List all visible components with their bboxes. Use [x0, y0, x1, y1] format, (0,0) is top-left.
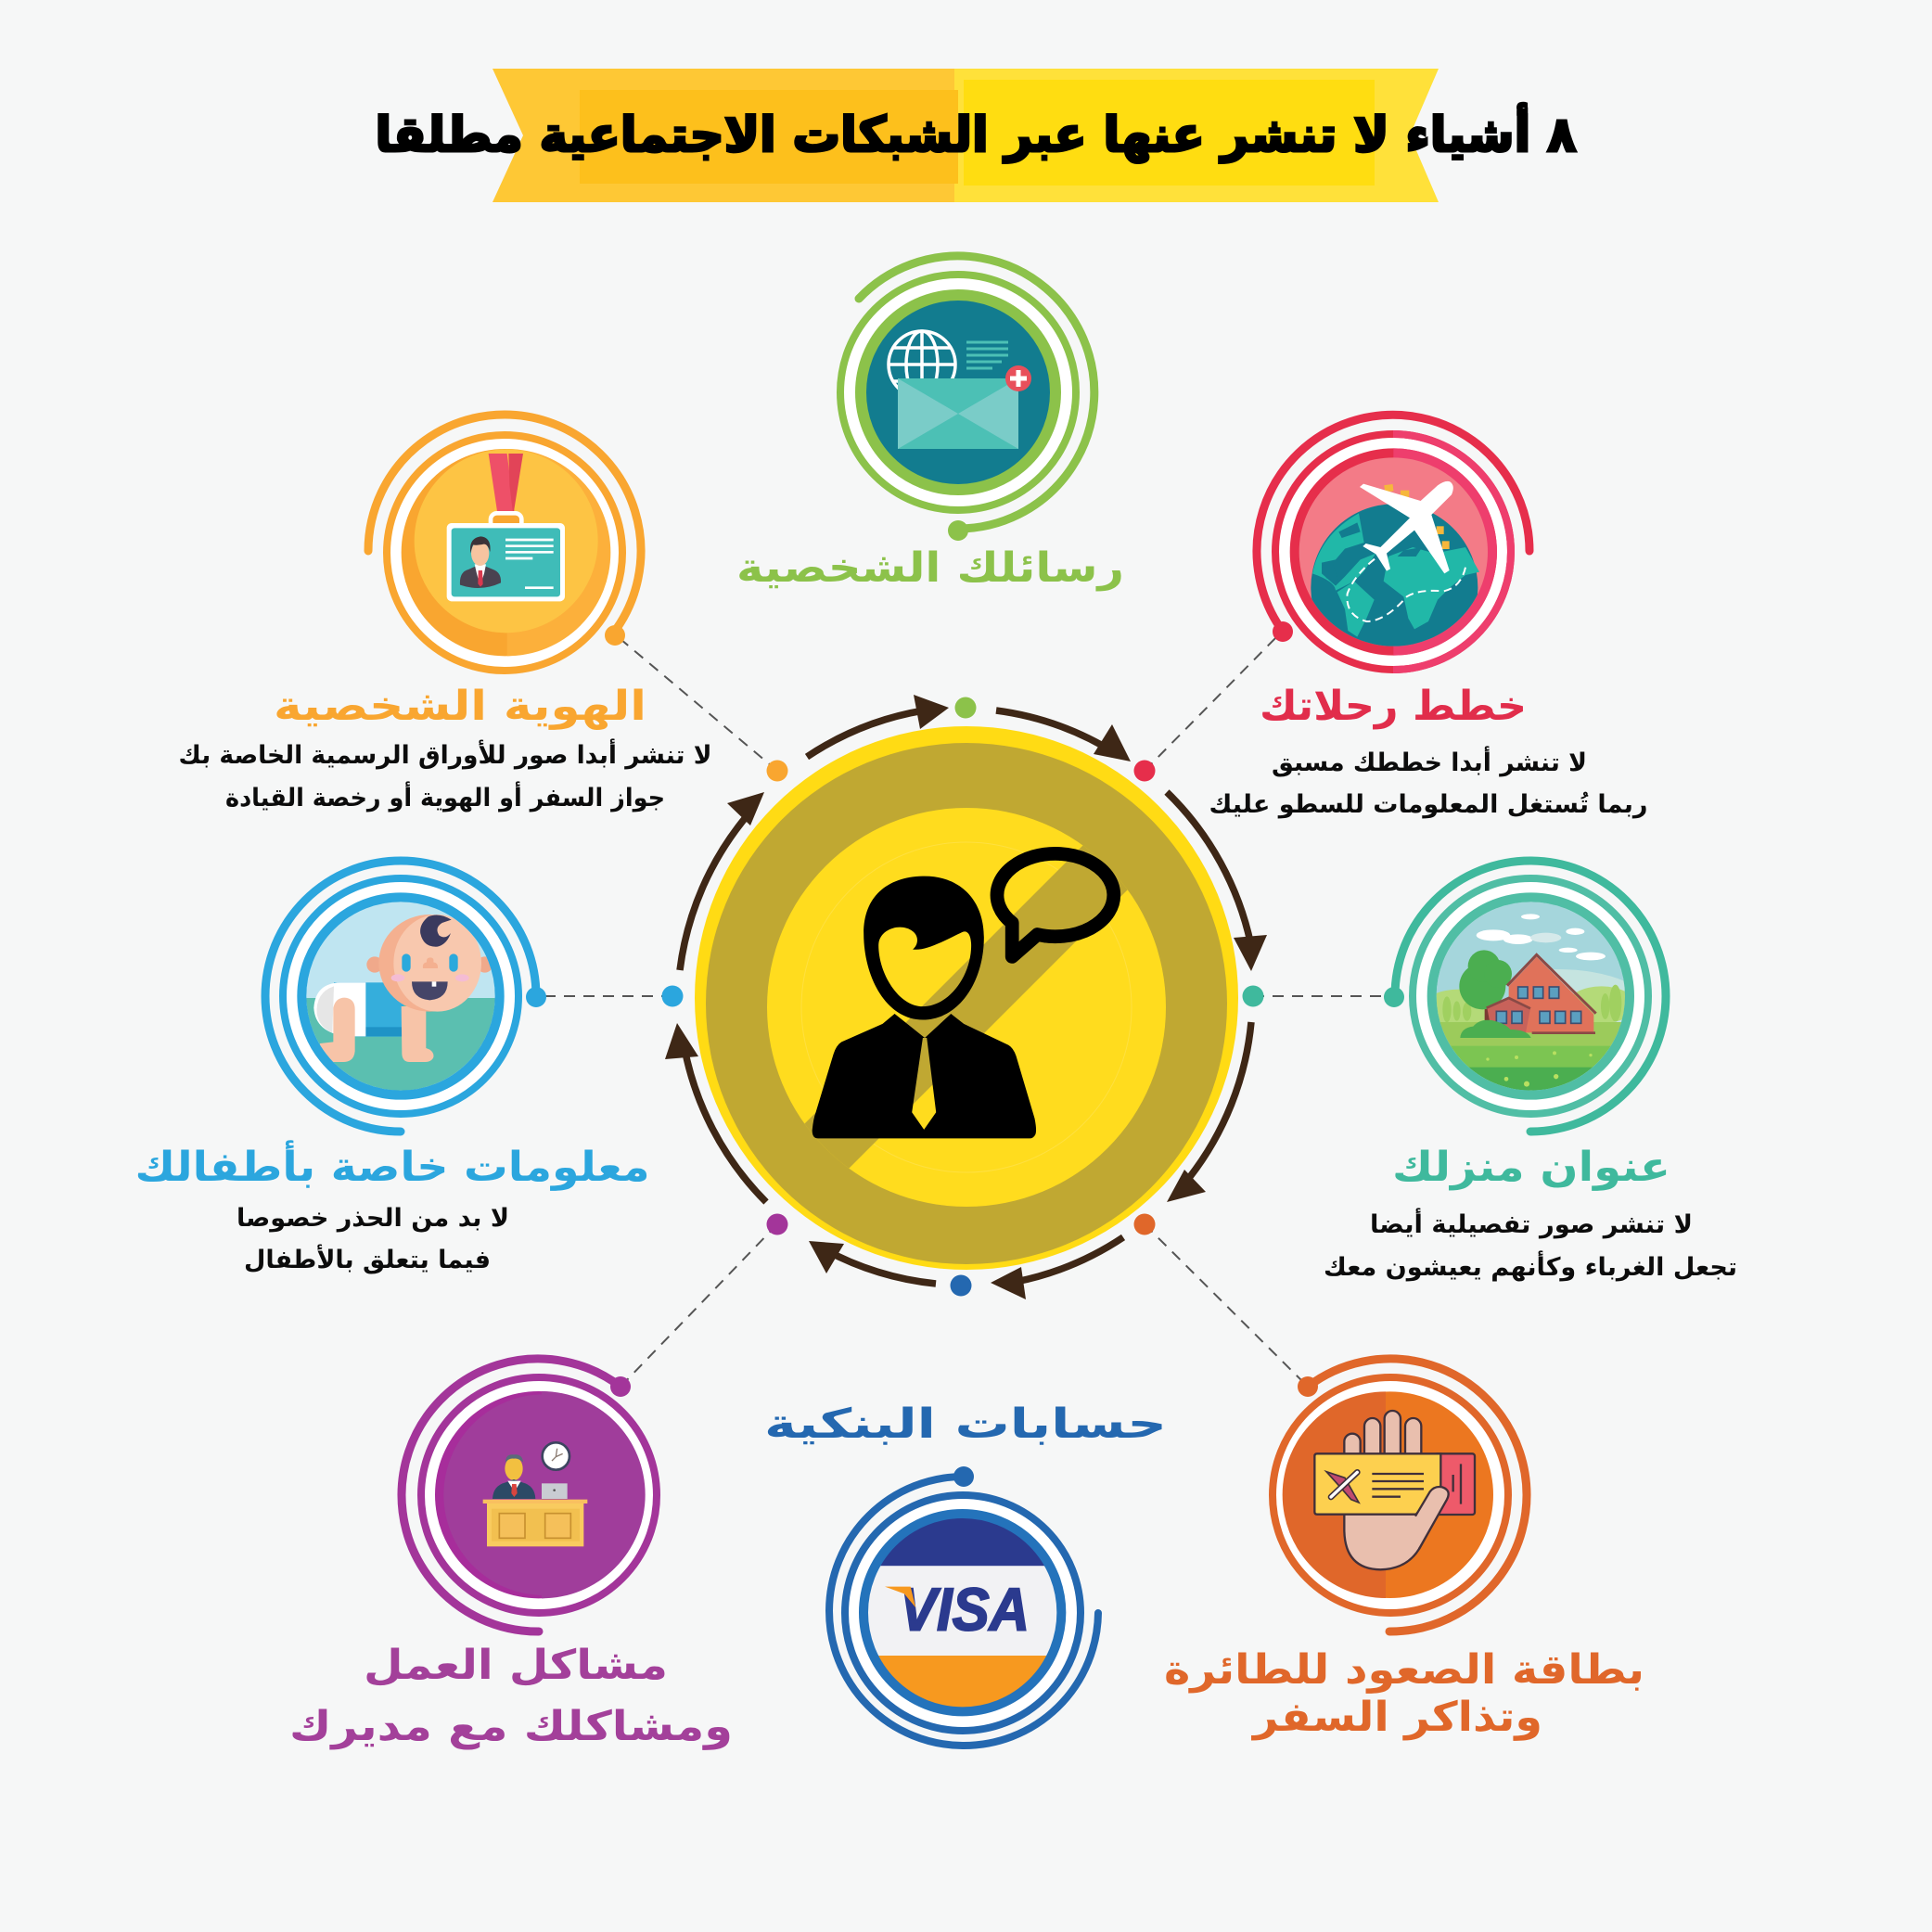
heading: bank accounts: حسابات البنكية — [764, 1401, 1167, 1448]
panel: children — [265, 861, 546, 1132]
icon: house landscape — [1422, 897, 1635, 1095]
text: identity: لا تنشر أبدا صور للأوراق الرسمية الخاصة بك — [178, 738, 712, 770]
heading: boarding pass: بطاقة الصعود للطائرة — [1164, 1646, 1644, 1694]
icon: crawling baby — [301, 897, 501, 1097]
text: identity: جواز السفر أو الهوية أو رخصة القيادة — [225, 781, 665, 812]
panel: personal messages — [840, 256, 1094, 541]
title: ٨ أشياء لا تنشر عنها عبر الشبكات الاجتماعية مطلقا — [375, 103, 1577, 163]
text: home address — [1324, 1208, 1737, 1282]
icon: VISA card — [863, 1512, 1064, 1714]
text: home address: تجعل الغرباء وكأنهم يعيشون معك — [1324, 1250, 1737, 1282]
text: travel plans — [1209, 746, 1647, 819]
heading: identity: الهوية الشخصية — [274, 683, 646, 730]
panel: bank accounts — [829, 1466, 1098, 1746]
circular arrows around central disc — [665, 695, 1267, 1299]
icon: person with speech bubble — [812, 853, 1114, 1138]
icon: hand holding ticket — [1283, 1391, 1493, 1598]
heading: children: معلومات خاصة بأطفالك — [135, 1140, 649, 1191]
panel: travel plans — [1257, 415, 1529, 671]
heading: personal messages: رسائلك الشخصية — [736, 544, 1124, 592]
icon: VISA card: VISA — [900, 1575, 1030, 1643]
ring dots — [662, 697, 1263, 1297]
panel: boarding pass — [1273, 1359, 1527, 1631]
text: travel plans: لا تنشر أبدا خططك مسبق — [1272, 746, 1587, 777]
icon: envelope with globe — [889, 331, 1031, 449]
text: travel plans: ربما تُستغل المعلومات للسطو عليك — [1209, 790, 1647, 819]
dashed connectors — [536, 632, 1395, 1387]
text: children: فيما يتعلق بالأطفال — [244, 1244, 491, 1274]
heading: boarding pass: وتذاكر السفر — [1251, 1694, 1542, 1741]
panel: identity — [368, 415, 641, 671]
text: children: لا بد من الحذر خصوصا — [237, 1204, 509, 1233]
heading: boarding pass — [1164, 1646, 1644, 1741]
heading: work problems: ومشاكلك مع مديرك — [289, 1703, 733, 1750]
text: children — [237, 1204, 509, 1274]
icon: plane over globe — [1290, 448, 1497, 671]
heading: work problems: مشاكل العمل — [364, 1642, 668, 1689]
heading: home address: عنوان منزلك — [1392, 1144, 1670, 1191]
title banner — [493, 69, 1439, 202]
icon: ID card — [402, 449, 610, 656]
text: home address: لا تنشر صور تفصيلية أيضا — [1370, 1208, 1693, 1239]
panel: work problems — [402, 1359, 657, 1631]
panel: home address — [1384, 861, 1666, 1132]
central disc: no personal sharing sign — [695, 726, 1238, 1272]
heading: work problems — [289, 1642, 733, 1750]
heading: travel plans: خطط رحلاتك — [1260, 683, 1527, 730]
text: identity — [178, 738, 712, 812]
icon: manager at desk — [435, 1391, 646, 1598]
